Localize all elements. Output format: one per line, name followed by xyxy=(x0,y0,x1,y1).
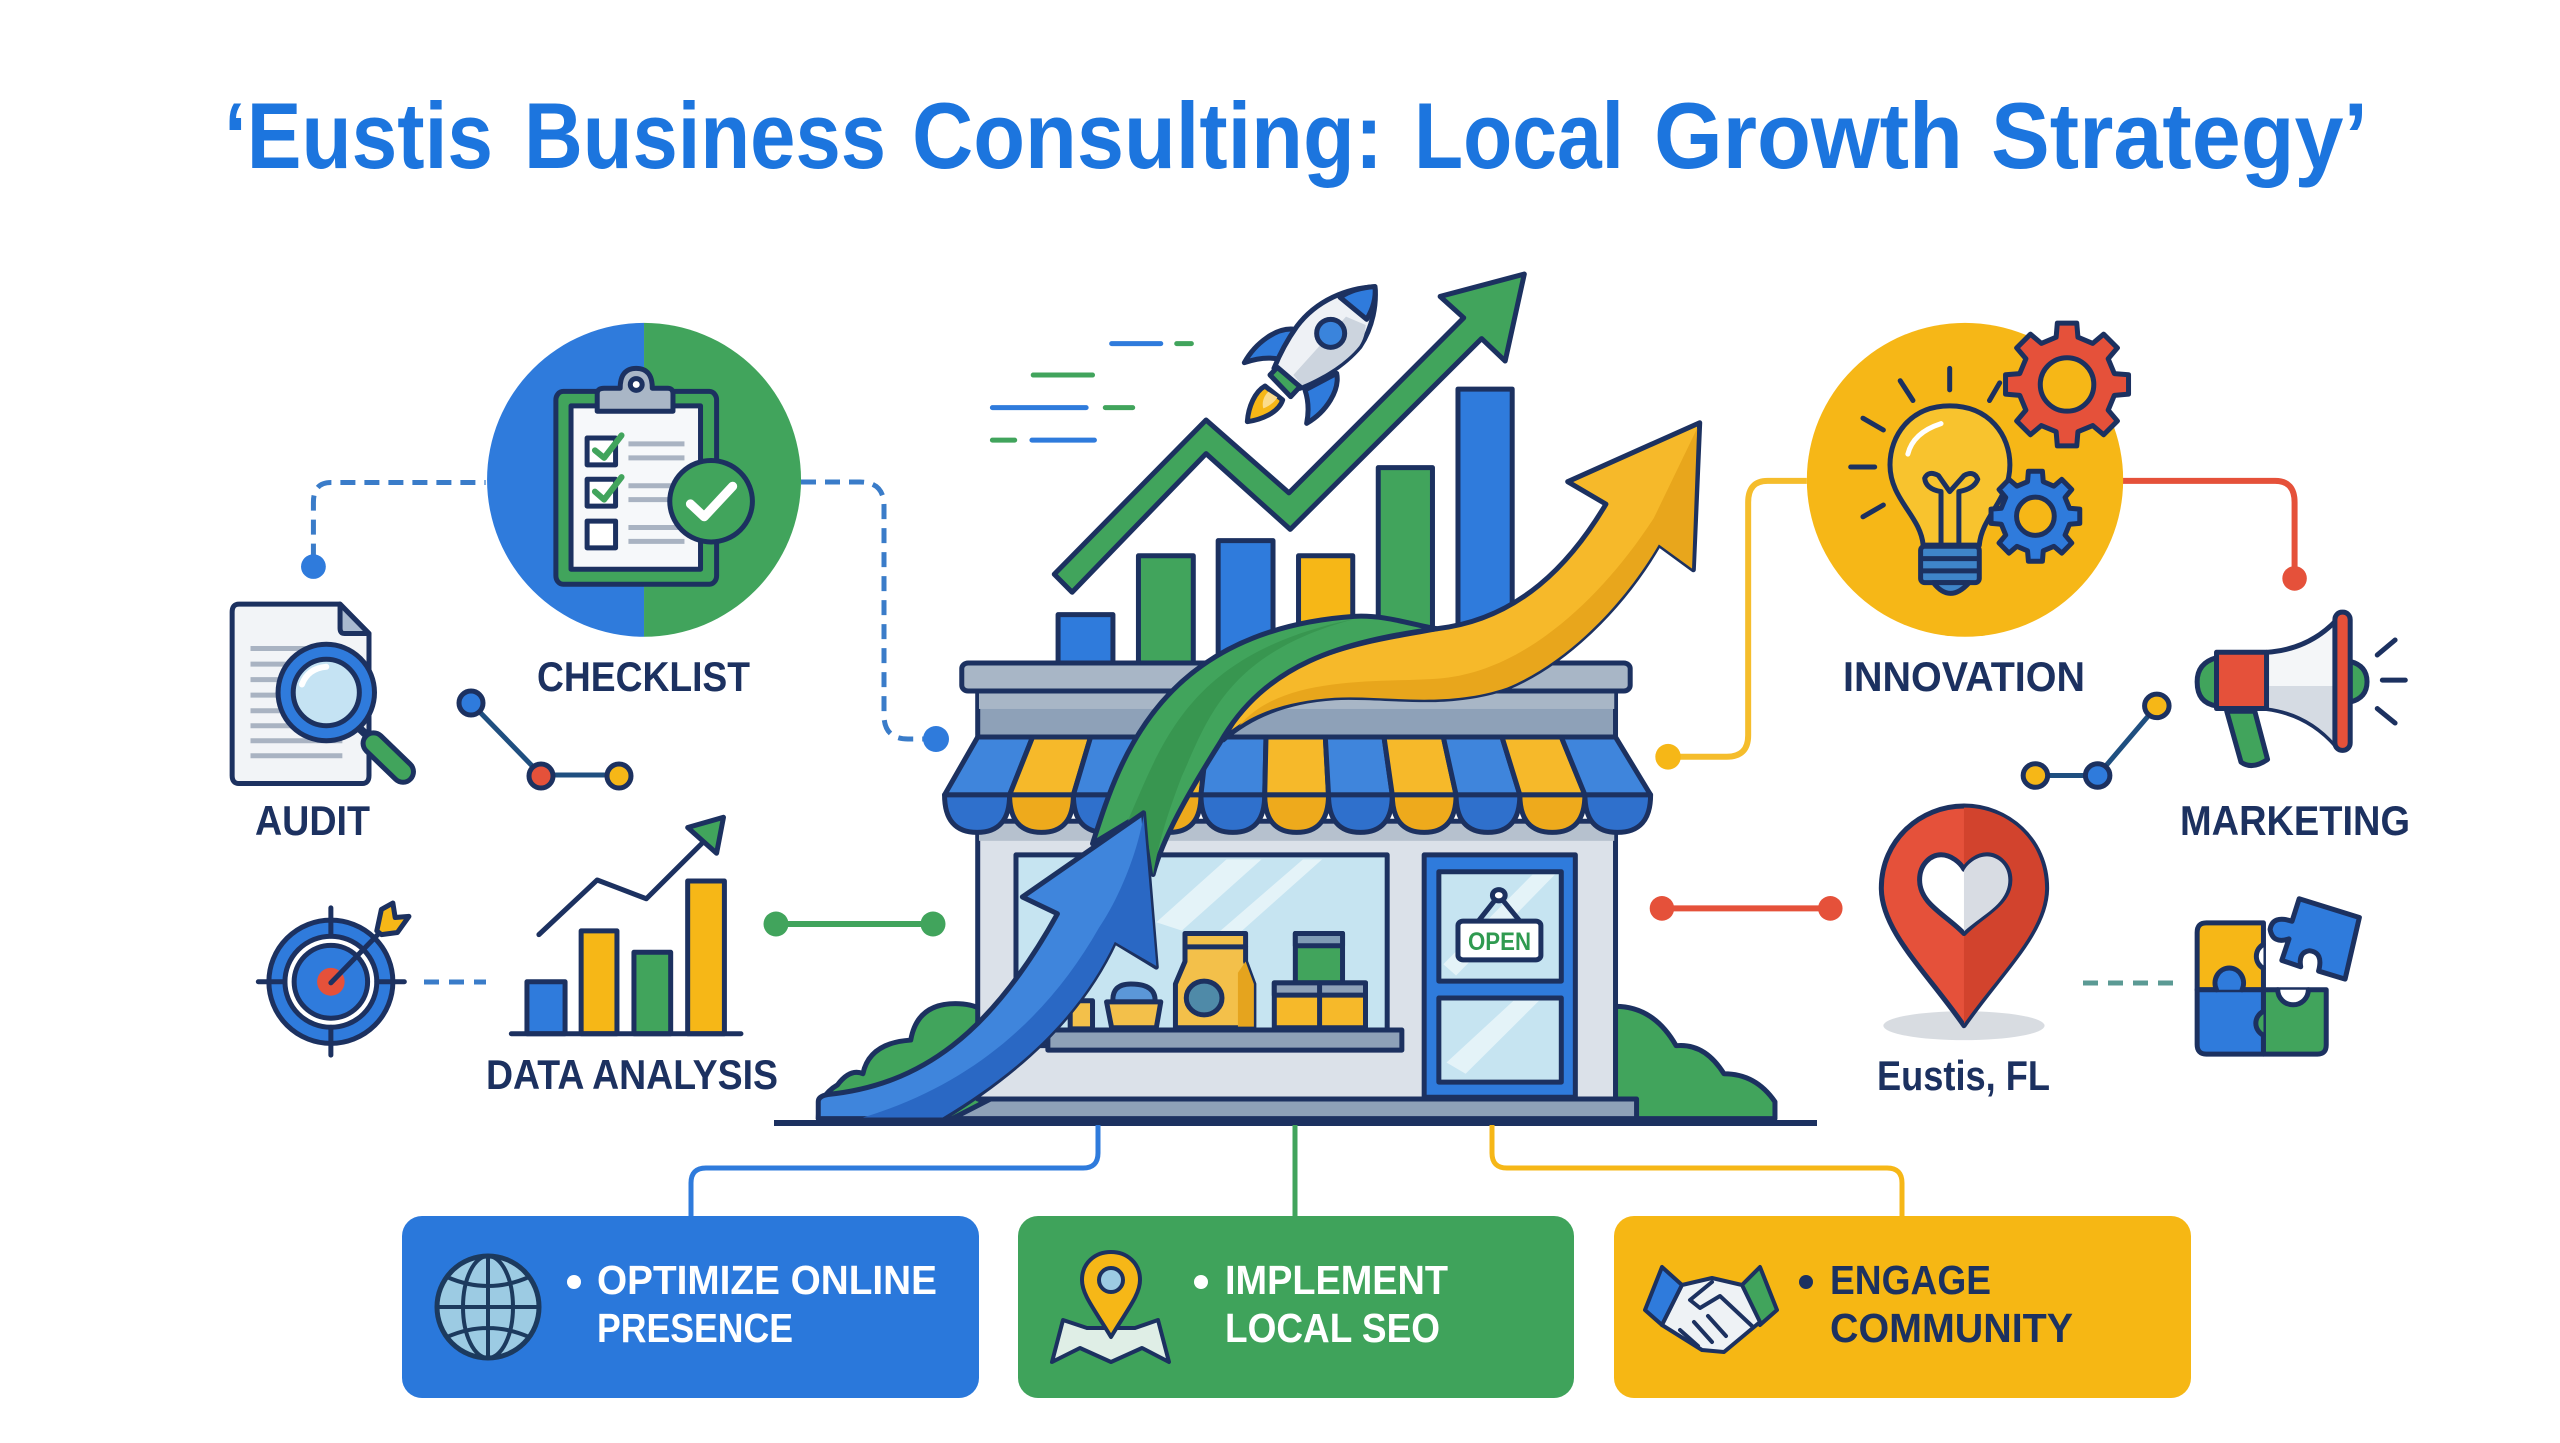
label: marketing: MARKETING xyxy=(2180,797,2410,844)
label: innovation: INNOVATION xyxy=(1843,653,2085,700)
panel: innovation xyxy=(1807,323,2129,700)
sign text: OPEN: OPEN xyxy=(1468,928,1531,956)
connector: target to data analysis (dashed) xyxy=(424,980,486,984)
door xyxy=(1424,855,1575,1097)
connector: node link left xyxy=(459,691,631,788)
speed lines green xyxy=(992,344,1191,440)
icon: audit document with magnifier xyxy=(232,604,403,844)
connector: node link right xyxy=(2023,694,2169,787)
bullet text: ENGAGE xyxy=(1830,1257,1991,1303)
panel: engage community xyxy=(1614,1216,2191,1398)
title: Consulting: xyxy=(912,83,1383,188)
bullet text xyxy=(567,1257,937,1351)
label: Eustis, FL: Eustis, FL xyxy=(1877,1052,2050,1099)
bullet text: OPTIMIZE ONLINE xyxy=(597,1257,937,1303)
title: Business xyxy=(524,83,886,188)
illustration: storefront with growth chart and arrows xyxy=(818,274,1775,1119)
connector: store to engage community xyxy=(1492,1125,1902,1216)
title: Growth xyxy=(1654,83,1963,188)
connector: pin to puzzle (dashed) xyxy=(2083,980,2173,986)
connector: innovation to store (yellow) xyxy=(1655,481,1807,770)
connector: checklist to audit (dashed) xyxy=(301,482,486,579)
bushes xyxy=(818,1004,1775,1119)
ground line xyxy=(774,1120,1817,1126)
bullet text: PRESENCE xyxy=(597,1305,793,1351)
yellow growth arrow xyxy=(1223,423,1700,740)
connector: checklist to store (dashed) xyxy=(801,482,949,752)
icon: target with arrow xyxy=(258,903,409,1055)
bullet text: LOCAL SEO xyxy=(1225,1305,1440,1351)
green zigzag trend arrow xyxy=(1054,274,1524,592)
blue growth arrow xyxy=(818,813,1156,1119)
chart: data analysis xyxy=(486,817,778,1098)
speed lines xyxy=(992,344,1161,440)
title: Local xyxy=(1414,83,1624,188)
title: Strategy’ xyxy=(1991,83,2368,188)
label: data analysis: DATA ANALYSIS xyxy=(486,1051,778,1098)
bullet text: COMMUNITY xyxy=(1830,1305,2073,1351)
shop window xyxy=(1016,855,1402,1050)
label: audit: AUDIT xyxy=(255,797,370,844)
panel: optimize online presence xyxy=(402,1216,979,1398)
bullet text xyxy=(1194,1257,1448,1351)
label: checklist: CHECKLIST xyxy=(537,653,750,700)
connector: store to implement local SEO xyxy=(1292,1125,1298,1216)
skyline bars xyxy=(1058,389,1512,665)
icon: map pin xyxy=(1052,1252,1169,1362)
icon: rocket xyxy=(1244,287,1375,423)
icon: globe xyxy=(437,1256,539,1358)
icon: handshake xyxy=(1645,1267,1777,1352)
title: ‘Eustis xyxy=(224,83,493,188)
bullet text xyxy=(1799,1257,2073,1351)
connector: data analysis to store (green) xyxy=(764,912,946,936)
step base xyxy=(952,1099,1637,1119)
connector: store to location pin (red) xyxy=(1650,896,1843,921)
green growth arrow xyxy=(1093,616,1437,875)
panel: implement local SEO xyxy=(1018,1216,1574,1398)
icon: megaphone xyxy=(2180,612,2410,844)
awning xyxy=(945,737,1651,832)
store walls and roof xyxy=(962,663,1630,1099)
connector: innovation to marketing (red) xyxy=(2122,481,2307,591)
bullet text: IMPLEMENT xyxy=(1225,1257,1448,1303)
panel: checklist xyxy=(487,323,801,700)
icon: puzzle pieces xyxy=(2197,899,2359,1054)
icon: location pin with heart xyxy=(1877,806,2050,1099)
connector: store to optimize online presence xyxy=(691,1125,1098,1216)
